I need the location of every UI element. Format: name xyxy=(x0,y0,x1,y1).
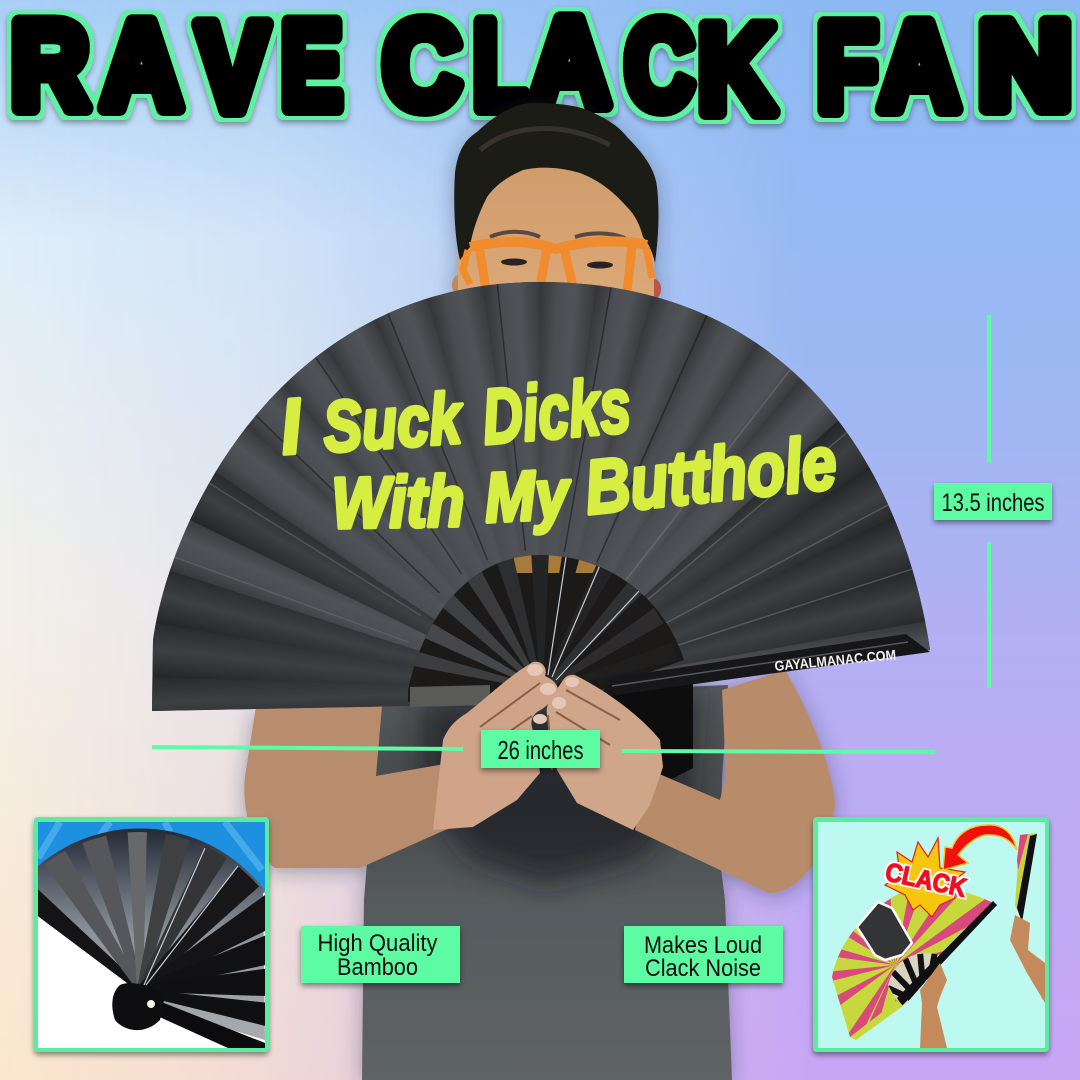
starburst xyxy=(885,838,965,917)
striped mini fan xyxy=(832,892,997,1037)
grey tank top xyxy=(362,685,732,1080)
fan fabric xyxy=(152,282,930,711)
white background xyxy=(38,892,265,1048)
fan slogan: With xyxy=(331,462,465,544)
height line top xyxy=(987,315,991,462)
label: makes loud clack noise: Makes Loud xyxy=(644,932,762,959)
title: V xyxy=(197,0,268,137)
label: 13.5 inches xyxy=(934,483,1052,520)
fan slogan: Dicks xyxy=(479,360,634,461)
site name: GAYALMANAC.COM xyxy=(774,646,897,674)
title: C xyxy=(625,0,694,135)
fan slogan: I xyxy=(277,381,306,471)
black fan xyxy=(152,282,930,711)
title xyxy=(11,0,1072,139)
title: R xyxy=(11,0,89,135)
right hand and arm xyxy=(1010,915,1045,1003)
dark sector xyxy=(38,828,265,1040)
left hand and arm xyxy=(920,963,947,1048)
left arm xyxy=(244,706,490,868)
title: K xyxy=(698,0,775,139)
label: high quality bamboo: High Quality xyxy=(318,930,438,957)
hair xyxy=(454,103,658,263)
orange glasses xyxy=(463,241,652,292)
fingernails xyxy=(527,664,579,724)
title: F xyxy=(817,0,878,137)
hands xyxy=(433,662,663,830)
ears xyxy=(452,275,466,295)
label: 26 inches: 26 inches xyxy=(498,735,584,765)
person xyxy=(244,103,835,1080)
mini fan handle xyxy=(897,901,997,1006)
black shirt patch xyxy=(610,684,693,790)
black handle rib with site name xyxy=(600,634,930,697)
panel: clack noise illustration xyxy=(809,816,1053,1059)
height line bottom xyxy=(987,542,991,688)
fan slogan xyxy=(277,360,840,544)
left hand xyxy=(433,662,558,830)
title: C xyxy=(383,0,461,135)
neck xyxy=(480,270,640,320)
title: E xyxy=(281,0,342,135)
label: high quality bamboo xyxy=(301,926,460,983)
dark shirt shadow xyxy=(420,690,700,885)
hair highlight xyxy=(480,129,610,150)
eyes xyxy=(501,258,613,268)
title: A xyxy=(101,0,182,135)
finger creases xyxy=(480,683,620,770)
grey bottom rib xyxy=(410,685,490,707)
CLACK burst word: CLACK xyxy=(883,857,969,903)
blue fabric xyxy=(38,822,265,894)
fan slogan: Butthole xyxy=(581,420,840,531)
panel: bamboo close-up xyxy=(30,816,273,1059)
label: 26 inches xyxy=(481,730,600,768)
hub and pin xyxy=(112,983,165,1030)
title: A xyxy=(879,0,960,135)
bamboo ribs xyxy=(38,832,265,1026)
label: 13.5 inches: 13.5 inches xyxy=(942,489,1044,517)
face xyxy=(458,164,654,300)
red curved arrow xyxy=(943,825,1017,870)
eyebrows xyxy=(490,232,625,238)
fan slogan: Suck xyxy=(321,378,467,468)
label: high quality bamboo: Bamboo xyxy=(337,954,418,981)
right hand xyxy=(547,675,663,830)
width line left xyxy=(152,747,463,749)
fan slogan: My xyxy=(483,455,573,537)
right arm xyxy=(635,670,835,893)
mini fan ribs xyxy=(888,953,940,1005)
small closed fan xyxy=(1015,833,1037,922)
label: makes loud clack noise xyxy=(624,926,783,983)
width line right xyxy=(622,751,935,752)
fan cut-out showing ribs xyxy=(408,555,684,702)
label: makes loud clack noise: Clack Noise xyxy=(645,955,761,982)
trash can xyxy=(857,902,912,960)
